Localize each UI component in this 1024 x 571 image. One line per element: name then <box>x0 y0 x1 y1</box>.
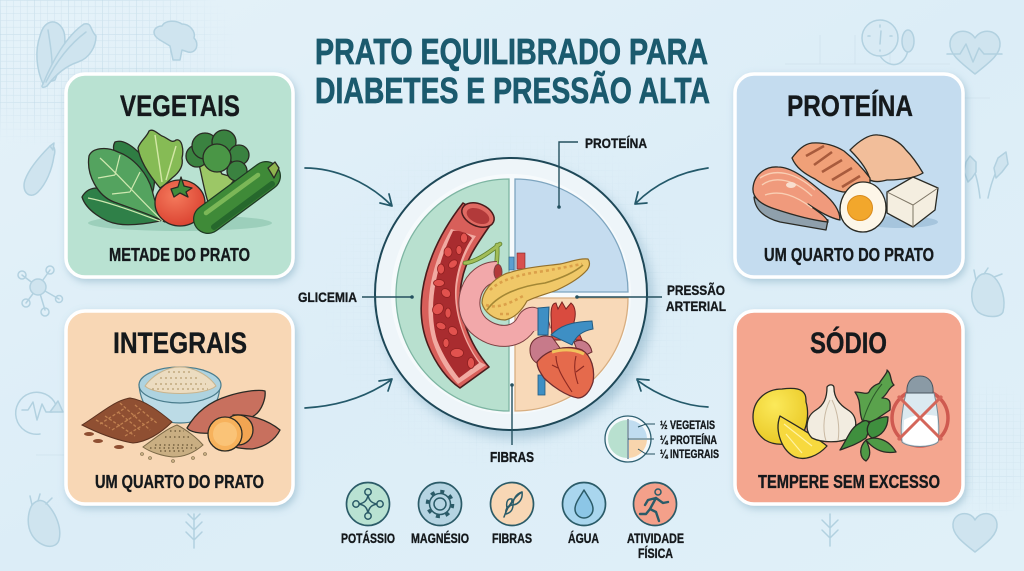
plate section: grains quarter <box>515 298 628 411</box>
heading: proteina: PROTEÍNA <box>787 89 913 123</box>
icon: background wheat <box>964 152 1008 198</box>
icon: background heart right <box>972 268 1004 316</box>
title: PRATO EQUILIBRADO PARA <box>315 31 708 72</box>
callout: pressao arterial <box>575 281 726 314</box>
caption: metade do prato: METADE DO PRATO <box>109 245 250 265</box>
legend labels: ¼ PROTEÍNA <box>660 432 717 447</box>
callout: glicemia: GLICEMIA <box>298 289 357 305</box>
heading: integrais: INTEGRAIS <box>113 327 247 360</box>
heading: vegetais: VEGETAIS <box>120 90 240 123</box>
icon row: atividade fisica: FÍSICA <box>638 546 673 561</box>
plate <box>375 158 653 438</box>
arrow: proteina to plate <box>635 168 708 204</box>
icon row: magnesio: MAGNÉSIO <box>411 531 469 546</box>
icon: background blood pressure gauge <box>862 20 914 65</box>
arrow: sodio to plate <box>637 379 708 407</box>
illustration: proteins <box>753 135 938 232</box>
panel: vegetais <box>66 74 293 277</box>
callout: fibras <box>490 383 534 466</box>
illustration: seasonings <box>753 370 948 461</box>
arrow: integrais to plate <box>305 379 392 408</box>
callout: proteina: PROTEÍNA <box>585 135 647 151</box>
icon row: magnesio <box>411 482 469 546</box>
plate section: protein quarter <box>515 179 628 292</box>
title: DIABETES E PRESSÃO ALTA <box>315 69 710 111</box>
icon: background wheat sprig right <box>822 514 838 546</box>
icon row: potassio <box>341 482 395 546</box>
callout: fibras: FIBRAS <box>490 449 534 466</box>
panel: proteina <box>735 74 963 277</box>
panel: sodio <box>735 311 963 504</box>
icon row: atividade fisica <box>627 482 684 561</box>
callout: pressao arterial: ARTERIAL <box>666 298 726 314</box>
icon: background molecule <box>18 266 62 316</box>
icon row: fibras <box>490 482 534 546</box>
illustration: vegetables <box>82 130 279 231</box>
icon row: potassio: POTÁSSIO <box>341 531 395 546</box>
icon row: agua <box>562 482 606 546</box>
icon row: agua: ÁGUA <box>568 531 599 546</box>
legend labels: ¼ INTEGRAIS <box>660 447 719 461</box>
icon: background heart with pulse <box>947 31 1002 74</box>
icon row: atividade fisica: ATIVIDADE <box>627 531 684 546</box>
illustration: pancreas and duodenum <box>465 244 589 336</box>
panel: integrais <box>66 311 293 504</box>
legend: mini plate <box>605 416 719 462</box>
icon: background wheat bottom <box>186 514 202 548</box>
heading: sodio: SÓDIO <box>810 326 887 360</box>
legend labels <box>660 418 719 461</box>
icon: background eggplant <box>24 143 55 195</box>
caption: tempere sem excesso: TEMPERE SEM EXCESSO <box>758 472 940 492</box>
caption: um quarto do prato: UM QUARTO DO PRATO <box>95 472 264 492</box>
icon: background leafy greens <box>37 22 96 87</box>
illustration: heart <box>530 302 594 398</box>
callout: proteina <box>557 135 647 209</box>
icon row: fibras: FIBRAS <box>492 531 532 546</box>
icon: background heart left <box>28 494 60 546</box>
icon: background pulse cycle <box>16 392 63 434</box>
caption: um quarto do prato: UM QUARTO DO PRATO <box>764 245 934 265</box>
arrow: vegetais to plate <box>305 168 392 206</box>
illustration: blood vessel <box>421 198 498 388</box>
legend labels: ½ VEGETAIS <box>660 418 715 432</box>
callout: glicemia <box>298 289 414 305</box>
plate section: vegetables half <box>396 179 509 411</box>
icon: background heart bottom <box>953 514 997 552</box>
illustration: grains and sweet potato <box>82 367 280 462</box>
icon: background broccoli <box>154 21 197 60</box>
callout: pressao arterial: PRESSÃO <box>667 281 725 298</box>
title <box>315 31 710 111</box>
